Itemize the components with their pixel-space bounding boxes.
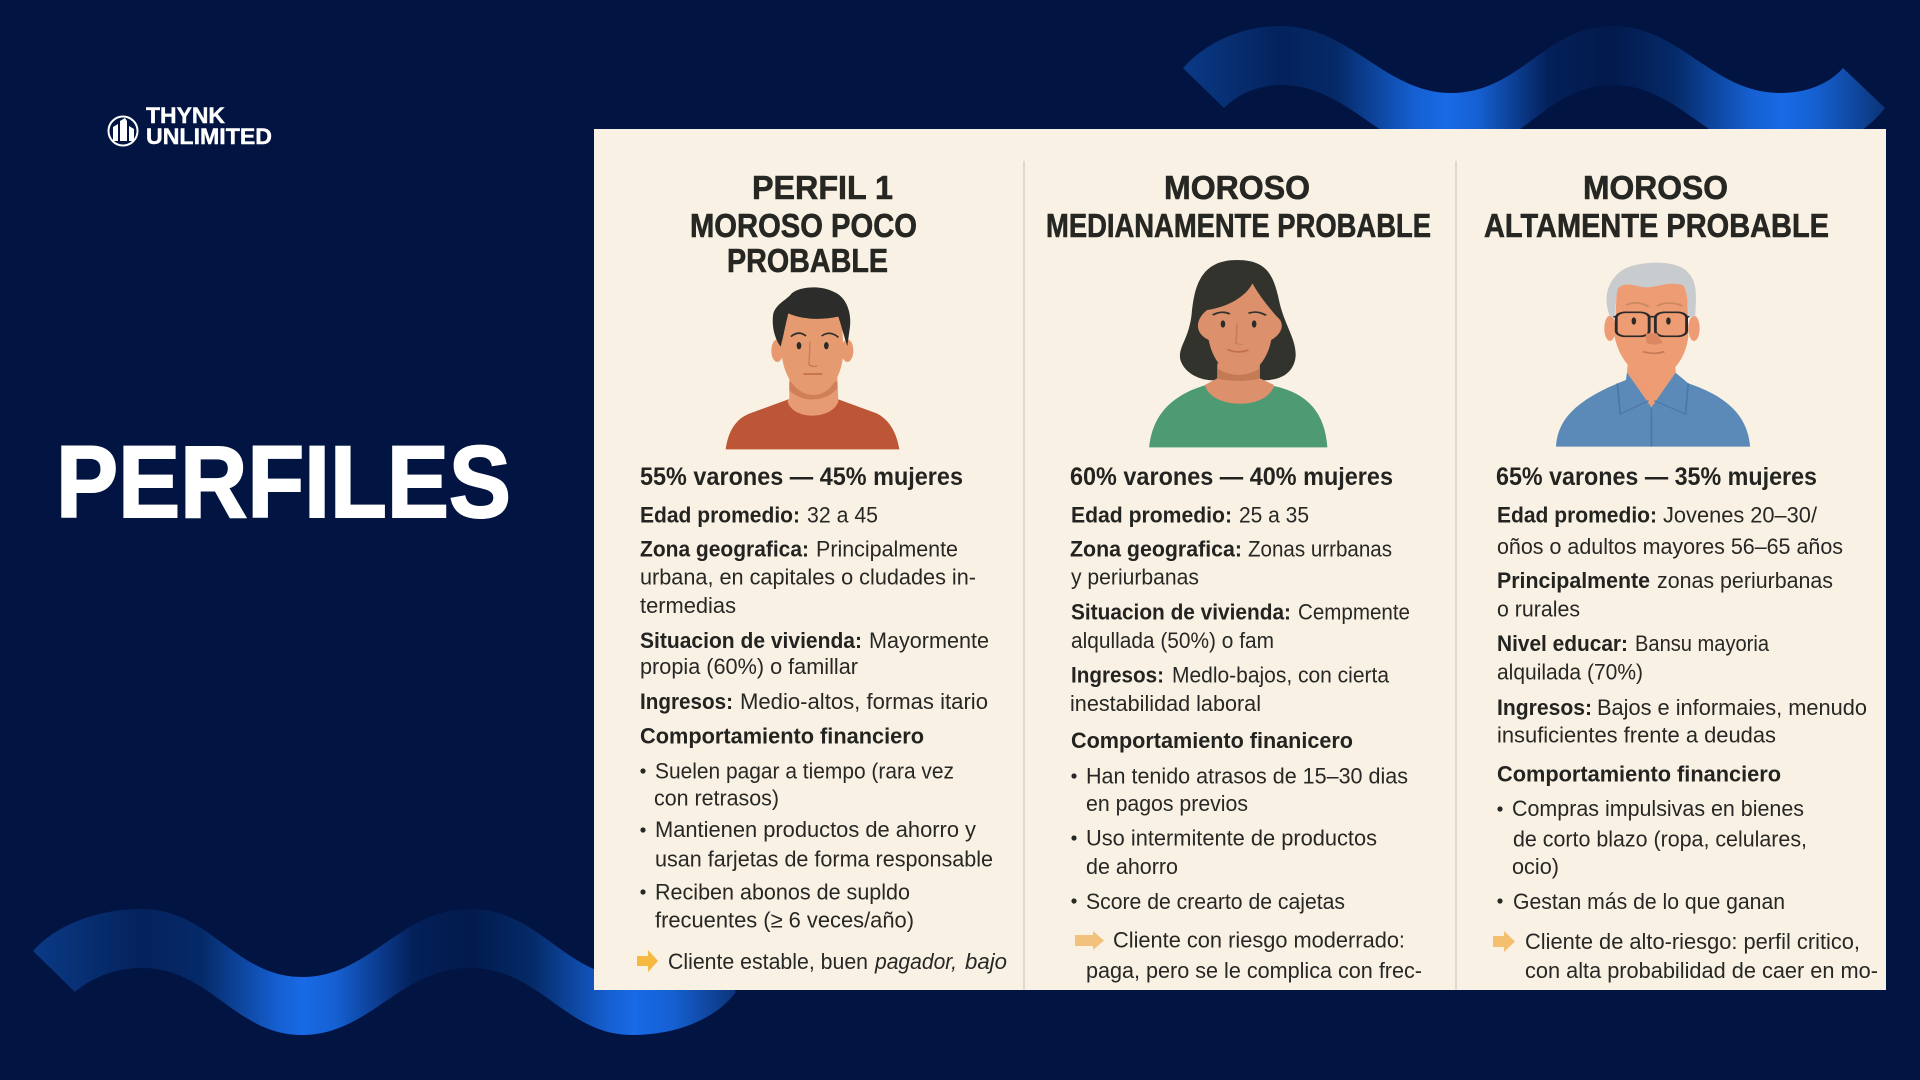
text block: demographics: Medio-altos, formas itario — [740, 689, 988, 714]
heading: perfil 1: MOROSO POCO — [690, 207, 917, 244]
text block: financial behaviour: frecuentes (≥ 6 veces/año) — [655, 908, 914, 933]
text block: demographics — [1497, 503, 1867, 748]
text block: demographics: Ingresos: — [1497, 695, 1592, 720]
column: moroso altamente probable — [1484, 169, 1878, 983]
text block: demographics: Bansu mayoria — [1635, 631, 1770, 656]
text block: financial behaviour: ocio) — [1512, 854, 1559, 879]
text block: financial behaviour — [1497, 762, 1807, 914]
text block: financial behaviour: en pagos previos — [1086, 791, 1248, 816]
text block: demographics: Edad promedio: — [1497, 503, 1657, 528]
callout: stable client: bajo — [965, 949, 1007, 974]
callout: moderate risk client — [1075, 928, 1422, 983]
text block: demographics: y periurbanas — [1071, 565, 1199, 590]
heading: moroso medianamente probable — [1046, 169, 1431, 244]
callout: moderate risk client: Cliente con riesgo moderrado: — [1113, 928, 1405, 953]
column: moroso medianamente probable — [1046, 169, 1431, 983]
stat: gender split: 65% varones — 35% mujeres — [1496, 463, 1817, 491]
icon: young man portrait — [726, 287, 899, 449]
text block: financial behaviour: Score de crearto de cajetas — [1086, 889, 1345, 914]
text block: demographics: alquilada (70%) — [1497, 659, 1643, 684]
text block: financial behaviour: de corto blazo (ropa, celulares, — [1513, 827, 1807, 852]
text block: demographics: Principalmente — [816, 536, 958, 561]
text block: demographics: termedias — [640, 593, 736, 618]
wave ribbon: top right — [1183, 26, 1885, 155]
text block: demographics: Medlo-bajos, con cierta — [1172, 663, 1390, 688]
logo: UNLIMITED — [146, 124, 272, 149]
text block: demographics: urbana, en capitales o cludades in- — [640, 565, 976, 590]
text block: financial behaviour: Gestan más de lo que ganan — [1513, 889, 1785, 914]
callout: high risk client: con alta probabilidad de caer en mo- — [1525, 958, 1878, 983]
text block: financial behaviour: usan farjetas de forma responsable — [655, 847, 993, 872]
stat: gender split: 55% varones — 45% mujeres — [640, 463, 963, 491]
text block: financial behaviour: Uso intermitente de productos — [1086, 826, 1377, 851]
text block: demographics: Zona geografica: — [1070, 536, 1242, 561]
text block: demographics: Situacion de vivienda: — [1071, 599, 1291, 624]
text block: financial behaviour — [640, 724, 993, 933]
heading: moroso altamente probable: MOROSO — [1583, 169, 1728, 206]
text block: demographics: Edad promedio: — [640, 503, 800, 528]
text block: demographics: Ingresos: — [640, 689, 733, 714]
heading: moroso altamente probable: ALTAMENTE PROBABLE — [1484, 207, 1829, 244]
title: PERFILES — [56, 425, 511, 539]
text block: financial behaviour: Suelen pagar a tiempo (rara vez — [655, 758, 954, 783]
text block: demographics: zonas periurbanas — [1657, 568, 1833, 593]
text block: financial behaviour: Han tenido atrasos de 15–30 dias — [1086, 764, 1408, 789]
text block: demographics: oños o adultos mayores 56–65 años — [1497, 534, 1843, 559]
text block: financial behaviour: con retrasos) — [654, 786, 779, 811]
text block: financial behaviour: Mantienen productos de ahorro y — [655, 817, 976, 842]
heading: perfil 1 — [690, 169, 917, 279]
text block: demographics: alqullada (50%) o fam — [1071, 628, 1274, 653]
logo: THYNK — [146, 103, 225, 128]
text block: financial behaviour: de ahorro — [1086, 854, 1178, 879]
text block: demographics: Ingresos: — [1071, 663, 1164, 688]
text block: financial behaviour: Comportamiento financiero — [640, 724, 924, 749]
heading: moroso medianamente probable: MOROSO — [1164, 169, 1310, 206]
text block: financial behaviour — [1071, 728, 1408, 914]
text block: demographics: 25 a 35 — [1239, 503, 1309, 528]
heading: perfil 1: PROBABLE — [727, 242, 888, 279]
text block: demographics: Nivel educar: — [1497, 631, 1628, 656]
column: perfil 1 — [637, 169, 1007, 974]
callout: stable client: pagador, — [874, 949, 957, 974]
text block: demographics: Zona geografica: — [640, 536, 809, 561]
wave ribbon: bottom left — [33, 909, 736, 1035]
heading: perfil 1: PERFIL 1 — [752, 169, 893, 206]
callout: stable client — [637, 949, 1007, 974]
text block: demographics: Bajos e informaies, menudo — [1597, 695, 1867, 720]
text block: demographics — [640, 503, 989, 714]
text block: financial behaviour: Comportamiento financiero — [1497, 762, 1781, 786]
callout: high risk client: Cliente de alto-riesgo: perfil critico, — [1525, 929, 1860, 954]
heading: moroso medianamente probable: MEDIANAMENTE PROBABLE — [1046, 207, 1431, 244]
text block: demographics — [1070, 503, 1410, 716]
text block: demographics: insuficientes frente a deudas — [1497, 722, 1776, 748]
text block: demographics: o rurales — [1497, 596, 1580, 621]
text block: demographics: Principalmente — [1497, 568, 1650, 593]
logo — [108, 103, 272, 149]
text block: demographics: Edad promedio: — [1071, 503, 1232, 528]
text block: financial behaviour: Reciben abonos de supldo — [655, 879, 910, 904]
callout: stable client: Cliente estable, buen — [668, 949, 868, 974]
text block: financial behaviour: Comportamiento finanicero — [1071, 728, 1353, 753]
text block: demographics: 32 a 45 — [807, 503, 878, 528]
text block: demographics: Jovenes 20–30/ — [1663, 503, 1818, 528]
icon: woman portrait — [1149, 260, 1327, 447]
text block: demographics: Cempmente — [1298, 599, 1410, 624]
text block: demographics: inestabilidad laboral — [1070, 691, 1261, 716]
text block: demographics: Mayormente — [869, 628, 989, 653]
panel: profiles — [594, 129, 1886, 990]
text block: demographics: Situacion de vivienda: — [640, 628, 862, 653]
icon: older man portrait — [1556, 263, 1750, 447]
callout: moderate risk client: paga, pero se le complica con frec- — [1086, 958, 1422, 983]
callout: high risk client — [1493, 929, 1878, 983]
text block: demographics: propia (60%) o famillar — [640, 654, 858, 679]
text block: financial behaviour: Compras impulsivas en bienes — [1512, 796, 1804, 821]
stat: gender split: 60% varones — 40% mujeres — [1070, 463, 1393, 491]
heading: moroso altamente probable — [1484, 169, 1829, 244]
text block: demographics: Zonas urrbanas — [1248, 536, 1392, 561]
